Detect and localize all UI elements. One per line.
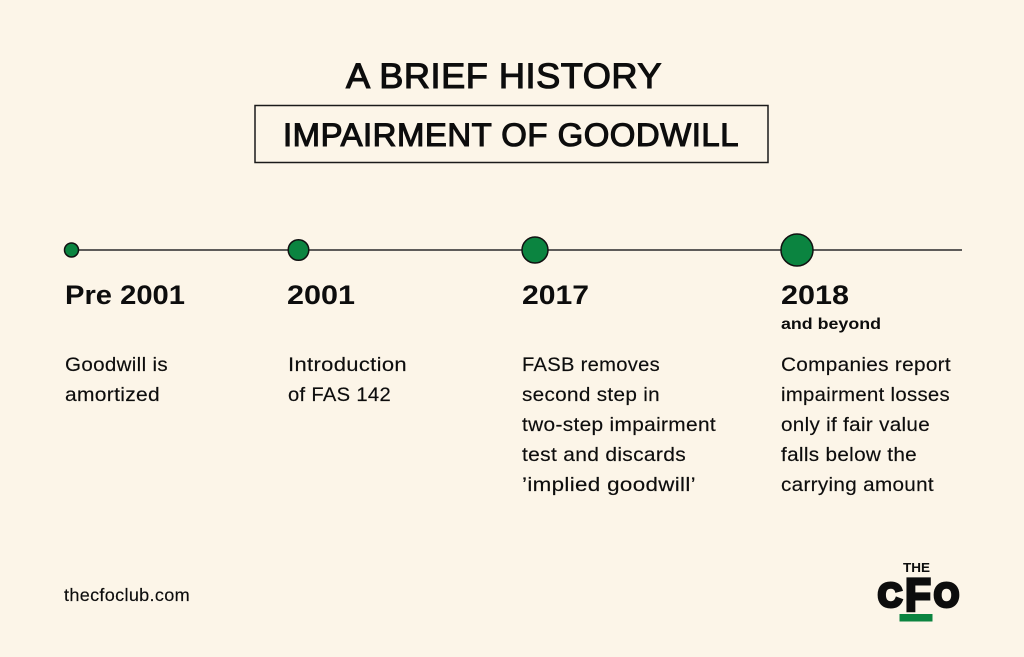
column: 2017: second step in <box>522 384 660 406</box>
column: 2018 and beyond: falls below the <box>781 444 917 466</box>
column: 2017 <box>522 280 716 496</box>
logo: The CFO: THE <box>903 560 930 575</box>
marker: 2001 <box>288 240 309 260</box>
logo: The CFO <box>878 560 959 622</box>
website url: thecfoclub.com <box>64 585 190 605</box>
column: 2018 and beyond: only if fair value <box>781 414 930 436</box>
column: 2018 and beyond: Companies report <box>781 354 951 376</box>
column: 2001: of FAS 142 <box>288 384 391 406</box>
column: 2018 and beyond: impairment losses <box>781 384 950 406</box>
marker: 2017 <box>522 237 548 263</box>
column: 2017: ’implied goodwill’ <box>522 474 696 496</box>
logo: The CFO: C <box>878 576 902 614</box>
marker: 2018 <box>781 234 813 266</box>
subtitle box: IMPAIRMENT OF GOODWILL <box>283 117 739 153</box>
timeline <box>64 234 962 266</box>
column: 2018 and beyond: and beyond <box>781 316 881 333</box>
column: 2017: FASB removes <box>522 354 660 376</box>
column: 2018 and beyond: carrying amount <box>781 474 934 496</box>
column: 2018 and beyond: 2018 <box>781 280 849 310</box>
column: 2001: 2001 <box>287 280 355 310</box>
title: A BRIEF HISTORY <box>346 56 662 96</box>
column: 2018 and beyond <box>781 280 951 496</box>
column: 2001: Introduction <box>288 354 407 376</box>
logo: The CFO: O <box>934 576 959 614</box>
column: 2001 <box>287 280 407 406</box>
logo: The CFO: F <box>905 568 931 620</box>
column: Pre 2001: amortized <box>65 384 160 406</box>
subtitle box <box>255 106 768 162</box>
column: 2017: two-step impairment <box>522 414 716 436</box>
column: Pre 2001 <box>65 280 185 406</box>
column: Pre 2001: Pre 2001 <box>65 280 185 310</box>
marker: Pre 2001 <box>64 243 78 257</box>
column: Pre 2001: Goodwill is <box>65 354 168 376</box>
column: 2017: test and discards <box>522 444 686 466</box>
column: 2017: 2017 <box>522 280 589 310</box>
